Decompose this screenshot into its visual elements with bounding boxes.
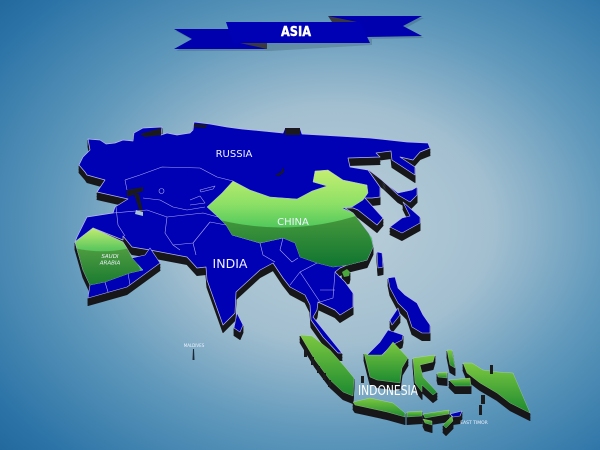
country borders (105, 167, 335, 302)
label: Maldives: MALDIVES (184, 343, 205, 348)
Southeast Asia blue islands (234, 277, 462, 417)
label: Russia: RUSSIA (216, 149, 253, 160)
title: ASIA (281, 25, 311, 40)
ribbon folds (240, 16, 357, 49)
title ribbon (174, 16, 424, 51)
map of Asia (70, 122, 530, 428)
Russian far east and Japan (368, 169, 420, 268)
label: China: CHINA (277, 217, 309, 228)
Saudi Arabia (74, 228, 143, 286)
island chain beside Sumatra (304, 350, 493, 415)
China (207, 170, 374, 268)
Maldives marker (192, 349, 194, 360)
label: Saudi Arabia: ARABIA (99, 260, 120, 266)
ribbon shadow (176, 18, 424, 51)
label: Saudi Arabia: SAUDI (101, 254, 119, 260)
label: Indonesia: INDONESIA (358, 383, 419, 399)
mainland Asia (75, 122, 430, 353)
Hainan (342, 269, 350, 277)
ribbon centre band (226, 22, 370, 43)
Arabian peninsula (75, 228, 160, 298)
Caspian water (135, 210, 143, 216)
Caspian, Baikal and northern dark edges (127, 124, 300, 212)
ribbon left tail (174, 29, 267, 49)
map extrusion shadow (75, 124, 530, 436)
label: East Timor: EAST TIMOR (460, 420, 488, 426)
ribbon right tail (328, 16, 422, 37)
label: India: INDIA (213, 256, 248, 271)
Indonesia islands (300, 335, 530, 428)
